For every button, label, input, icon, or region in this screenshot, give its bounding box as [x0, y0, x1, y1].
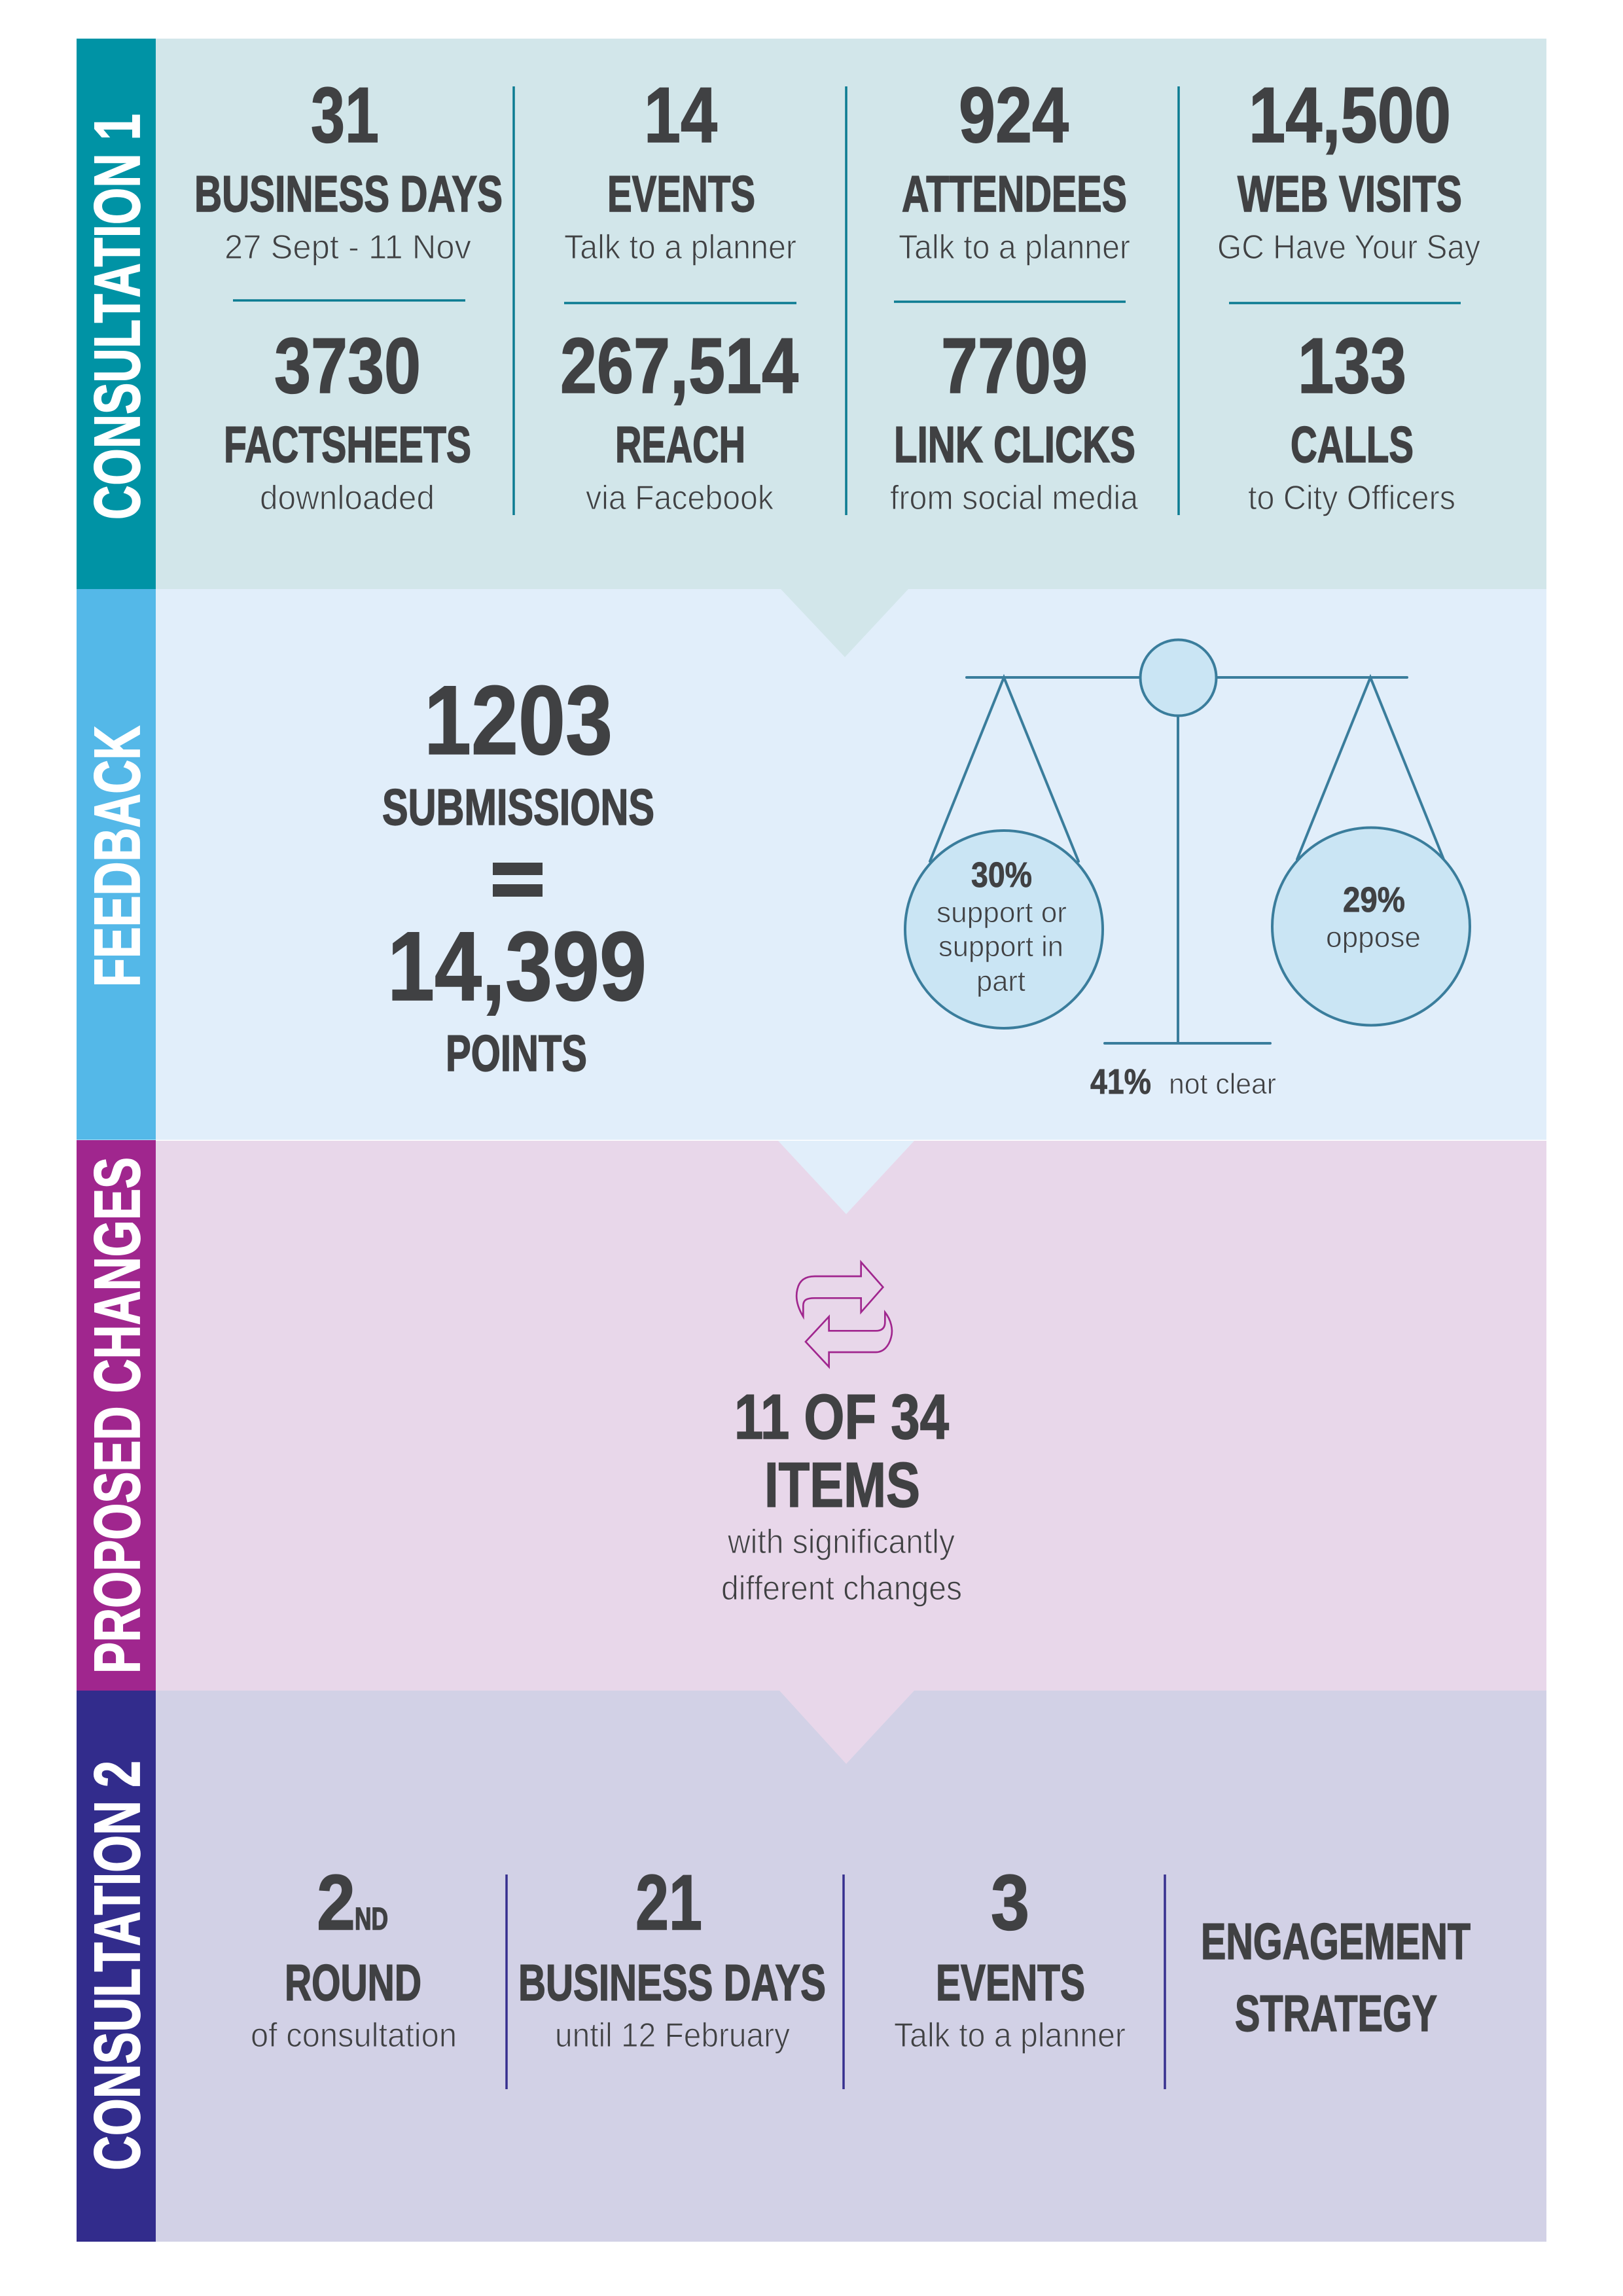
stat: 31 business days: BUSINESS DAYS	[194, 165, 503, 223]
stat: 133 calls: CALLS	[1291, 416, 1414, 473]
column dividers: consultation 2	[507, 1874, 1165, 2089]
stat: 133 calls: 133	[1298, 322, 1406, 410]
stat: 3 events: Talk to a planner	[894, 2017, 1126, 2054]
text: 11 of 34 items	[721, 1381, 962, 1607]
text: 11 of 34 items: different changes	[721, 1570, 962, 1607]
pointer: feedback to proposed changes	[778, 1141, 914, 1214]
sidebar: feedback: FEEDBACK	[80, 726, 153, 987]
panel: consultation 1	[77, 39, 1546, 589]
stat: 924 attendees: ATTENDEES	[902, 165, 1127, 223]
stat: 133 calls: to City Officers	[1248, 479, 1455, 517]
stat: 14 events	[564, 71, 796, 266]
stat: 3730 factsheets: downloaded	[260, 479, 435, 517]
stat: 3730 factsheets	[224, 322, 471, 517]
stat: 2nd round	[251, 1859, 457, 2054]
pan: 30% support: support in	[938, 931, 1063, 963]
stat: 1203 submissions equals 14,399 points: POINTS	[446, 1024, 587, 1082]
text: engagement strategy: ENGAGEMENT	[1201, 1912, 1471, 1970]
stat: 2nd round: of consultation	[251, 2017, 457, 2054]
stat: 14,500 web visits	[1217, 71, 1480, 266]
pointer: proposed changes to consultation 2	[779, 1691, 914, 1764]
text: 11 of 34 items: 11 OF 34	[734, 1381, 949, 1452]
pan: 30% support: support or	[936, 897, 1067, 929]
label: 41% not clear: not clear	[1169, 1068, 1276, 1100]
icon: exchange arrows	[796, 1262, 892, 1367]
stat: 7709 link clicks: 7709	[941, 322, 1088, 410]
stat: 267,514 reach: REACH	[615, 416, 745, 473]
pan: 29% oppose	[1272, 827, 1470, 1025]
stat: 1203 submissions equals 14,399 points: 1203	[424, 665, 613, 775]
column dividers: consultation 1	[233, 86, 1461, 515]
stat: 14 events: 14	[644, 71, 717, 159]
panel: feedback	[77, 589, 1546, 1140]
stat: 31 business days: 31	[311, 71, 379, 159]
label: 41% not clear	[1090, 1062, 1276, 1102]
pointer: consultation 1 to feedback	[781, 589, 908, 657]
stat: 1203 submissions equals 14,399 points: 14,399	[387, 911, 647, 1021]
stat: 3730 factsheets: 3730	[274, 322, 421, 410]
sidebar: consultation 2: CONSULTATION 2	[80, 1761, 153, 2170]
stat: 14,500 web visits: 14,500	[1249, 71, 1451, 159]
sidebar: proposed changes: PROPOSED CHANGES	[80, 1157, 153, 1674]
text: 11 of 34 items: ITEMS	[764, 1449, 920, 1520]
stat: 21 business days: BUSINESS DAYS	[518, 1954, 826, 2011]
text: 11 of 34 items: with significantly	[727, 1523, 955, 1561]
stat: 267,514 reach	[560, 322, 798, 517]
stat: 3 events: EVENTS	[936, 1954, 1085, 2011]
stat: 31 business days	[194, 71, 503, 266]
stat: 1203 submissions equals 14,399 points: SUBMISSIONS	[382, 778, 654, 836]
stat: 14,500 web visits: GC Have Your Say	[1217, 228, 1480, 266]
sidebar: feedback	[77, 589, 156, 1140]
stat: 3 events	[894, 1859, 1126, 2054]
stat: 7709 link clicks: from social media	[890, 479, 1138, 517]
stat: 924 attendees: 924	[959, 71, 1069, 159]
pan: 30% support	[905, 831, 1103, 1028]
stat: 3730 factsheets: FACTSHEETS	[224, 416, 471, 473]
sidebar: proposed changes	[77, 1140, 156, 1691]
stat: 2nd round: ROUND	[285, 1954, 421, 2011]
stat: 21 business days	[518, 1859, 826, 2054]
stat: 14,500 web visits: WEB VISITS	[1238, 165, 1462, 223]
stat: 14 events: Talk to a planner	[564, 228, 796, 266]
panel: proposed changes	[77, 1140, 1546, 1691]
stat: 21 business days: 21	[635, 1859, 702, 1946]
stat: 267,514 reach: via Facebook	[586, 479, 774, 517]
label: 41% not clear: 41%	[1090, 1062, 1151, 1102]
pan: 30% support: 30%	[971, 855, 1032, 895]
stat: 3 events: 3	[991, 1859, 1029, 1946]
stat: 2nd round: 2	[317, 1859, 355, 1946]
stat: 133 calls	[1248, 322, 1455, 517]
pan: 29% oppose: oppose	[1326, 922, 1421, 954]
pan: 29% oppose: 29%	[1343, 880, 1405, 920]
stat: 7709 link clicks: LINK CLICKS	[894, 416, 1135, 473]
stat: 267,514 reach: 267,514	[560, 322, 798, 410]
text: engagement strategy	[1201, 1912, 1471, 2042]
text: engagement strategy: STRATEGY	[1235, 1984, 1437, 2042]
stat: 2nd round: ND	[355, 1902, 388, 1937]
stat: 14 events: EVENTS	[607, 165, 755, 223]
stat: 31 business days: 27 Sept - 11 Nov	[224, 228, 471, 266]
stat: 1203 submissions equals 14,399 points	[382, 665, 654, 1082]
chart: balance scale	[905, 640, 1470, 1102]
stat: 924 attendees	[899, 71, 1130, 266]
panel: consultation 2	[77, 1691, 1546, 2242]
stat: 924 attendees: Talk to a planner	[899, 228, 1130, 266]
stat: 7709 link clicks	[890, 322, 1138, 517]
stat: 21 business days: until 12 February	[555, 2017, 790, 2054]
pan: 30% support: part	[976, 965, 1026, 997]
